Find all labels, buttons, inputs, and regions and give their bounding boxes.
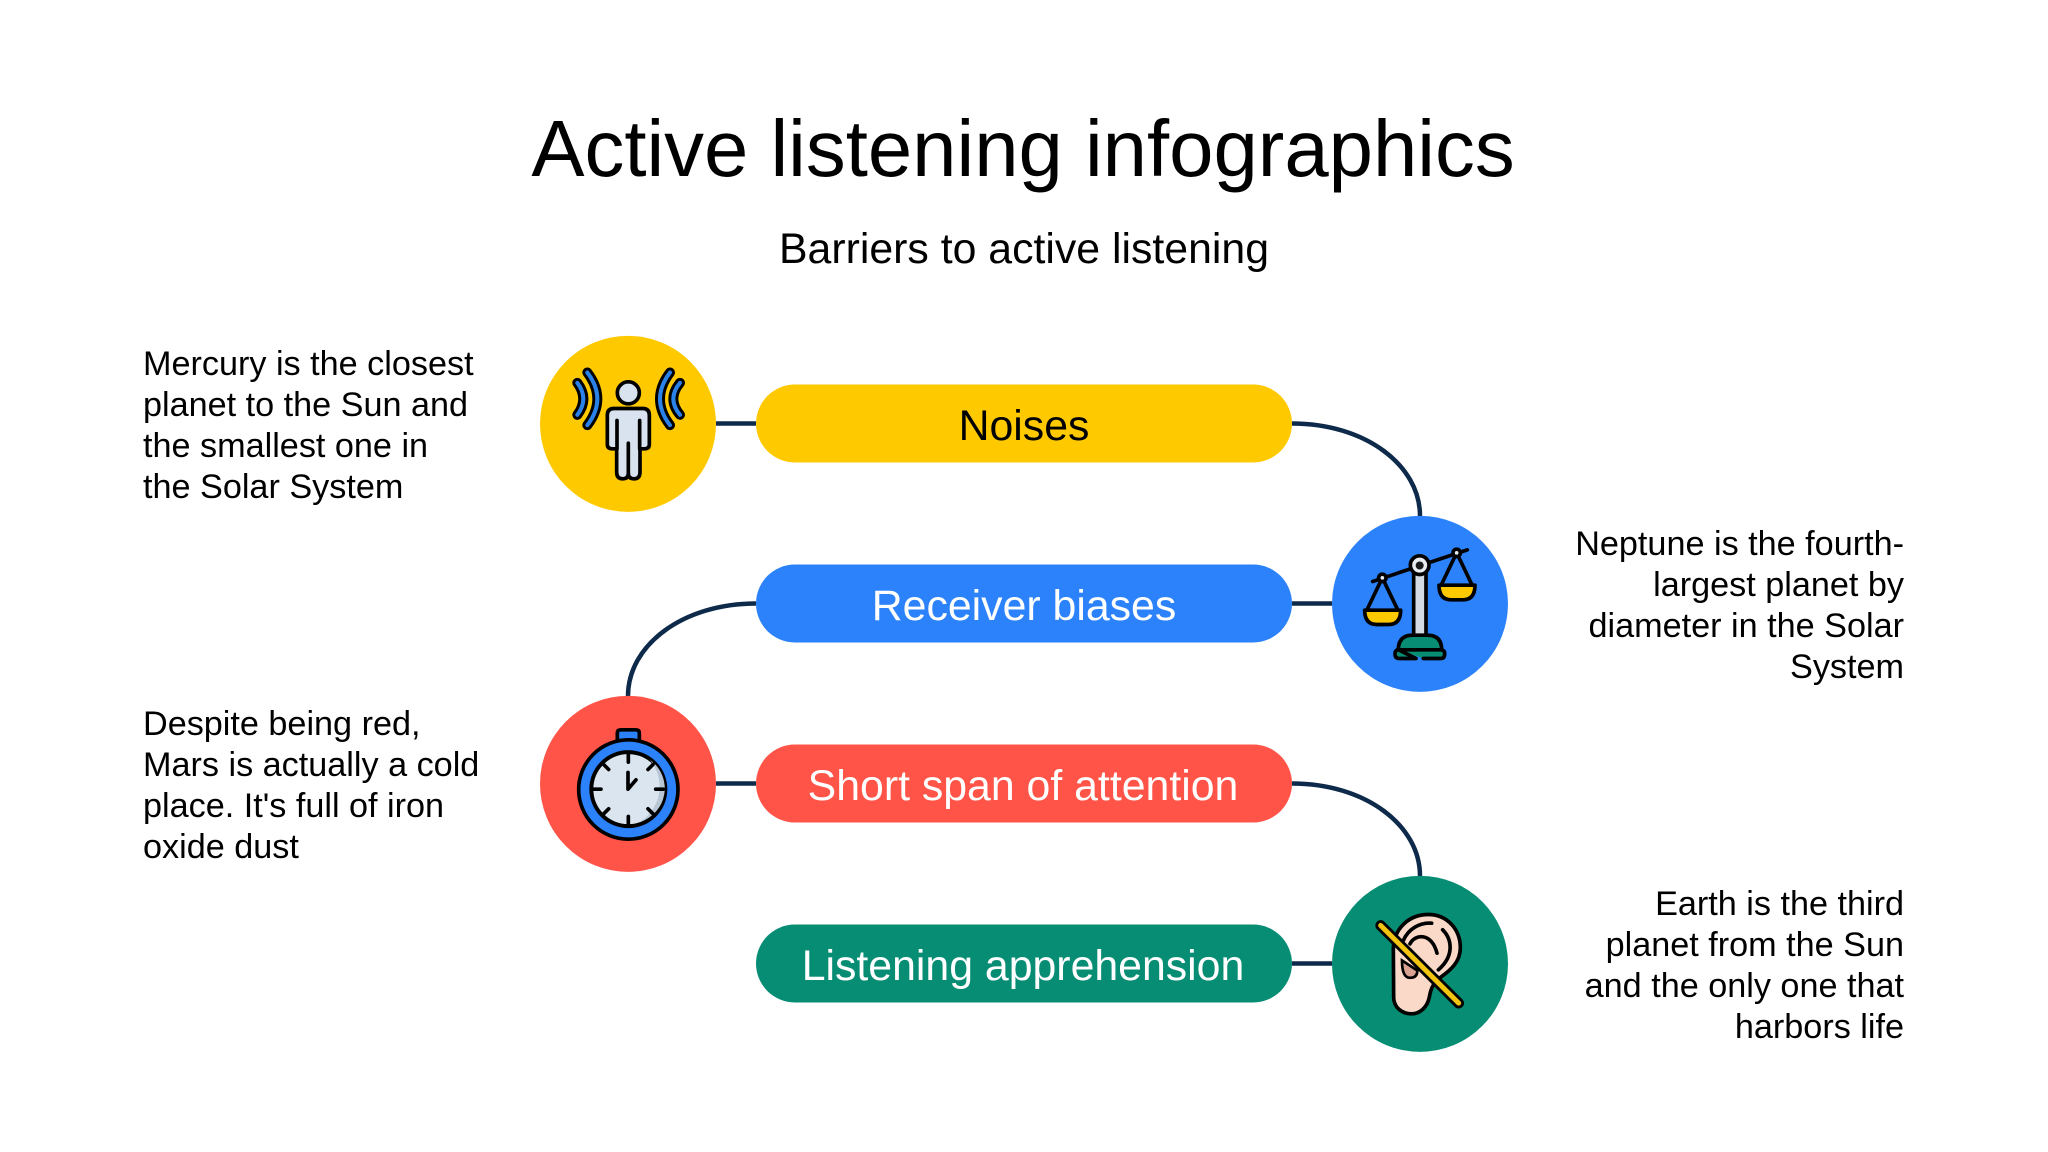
text block: Mercury: the Solar System: [143, 468, 403, 506]
connector: person icon to noises pill: [716, 421, 756, 426]
pill: Short span of attention: [756, 744, 1292, 822]
right pan: [1441, 553, 1472, 585]
connector: noises pill to scale icon: [1292, 424, 1420, 516]
text block: Mercury: planet to the Sun and: [143, 386, 468, 424]
icon: crossed-out ear: [1332, 876, 1508, 1052]
text block: Mars: Despite being red,: [143, 705, 420, 743]
stopwatch crown: [617, 730, 639, 741]
person body: [607, 408, 649, 479]
text block: Earth: planet from the Sun: [1606, 926, 1904, 964]
text block: Earth: Earth is the third: [1655, 885, 1904, 923]
pill: Listening apprehension: Listening apprehension: [802, 942, 1244, 990]
pill: Short span of attention: Short span of attention: [808, 762, 1238, 810]
crossing bar: [1381, 925, 1459, 1003]
sound waves right: [660, 372, 680, 425]
column: [1414, 572, 1426, 635]
text block: Earth: and the only one that: [1585, 967, 1904, 1005]
text block: Neptune: Neptune is the fourth-: [1575, 525, 1904, 563]
text block: Mercury: the smallest one in: [143, 427, 428, 465]
text block: Mars: Mars is actually a cold: [143, 746, 479, 784]
icon: balance scale: [1332, 516, 1508, 692]
subtitle: Barriers to active listening: [779, 225, 1269, 273]
connector: apprehension pill to ear icon: [1292, 961, 1332, 966]
text block: Mars: oxide dust: [143, 828, 299, 866]
stopwatch face: [591, 752, 665, 826]
sound waves left: [577, 372, 597, 425]
text block: Mars: place. It's full of iron: [143, 787, 444, 825]
text block: Neptune: System: [1790, 648, 1904, 686]
beam: [1373, 550, 1467, 581]
pill: Receiver biases: Receiver biases: [872, 582, 1176, 630]
icon: stopwatch: [540, 696, 716, 872]
text block: Neptune: largest planet by: [1653, 566, 1905, 604]
text block: Mercury: Mercury is the closest: [143, 345, 474, 383]
pill: Noises: Noises: [959, 402, 1089, 450]
connector: receiver biases pill to scale icon: [1292, 601, 1332, 606]
pill: Listening apprehension: [756, 924, 1292, 1002]
ear inner folds: [1403, 923, 1450, 970]
ear outline: [1393, 914, 1460, 1014]
left pan: [1367, 578, 1398, 610]
text block: Neptune: diameter in the Solar: [1589, 607, 1904, 645]
connector: receiver biases pill to stopwatch icon: [628, 604, 756, 696]
pill: Noises: [756, 384, 1292, 462]
connector: stopwatch icon to attention pill: [716, 781, 756, 786]
stopwatch outer ring: [579, 740, 678, 839]
pivot: [1410, 556, 1429, 574]
text block: Earth: harbors life: [1735, 1008, 1904, 1046]
connector: attention pill to ear icon: [1292, 784, 1420, 876]
icon: person surrounded by noise: [540, 336, 716, 512]
base: [1398, 635, 1442, 650]
title: Active listening infographics: [531, 104, 1515, 193]
person head: [617, 382, 639, 404]
pill: Receiver biases: [756, 564, 1292, 642]
ticks: [593, 754, 663, 824]
clock hands: [628, 772, 636, 789]
face shading: [640, 760, 665, 822]
